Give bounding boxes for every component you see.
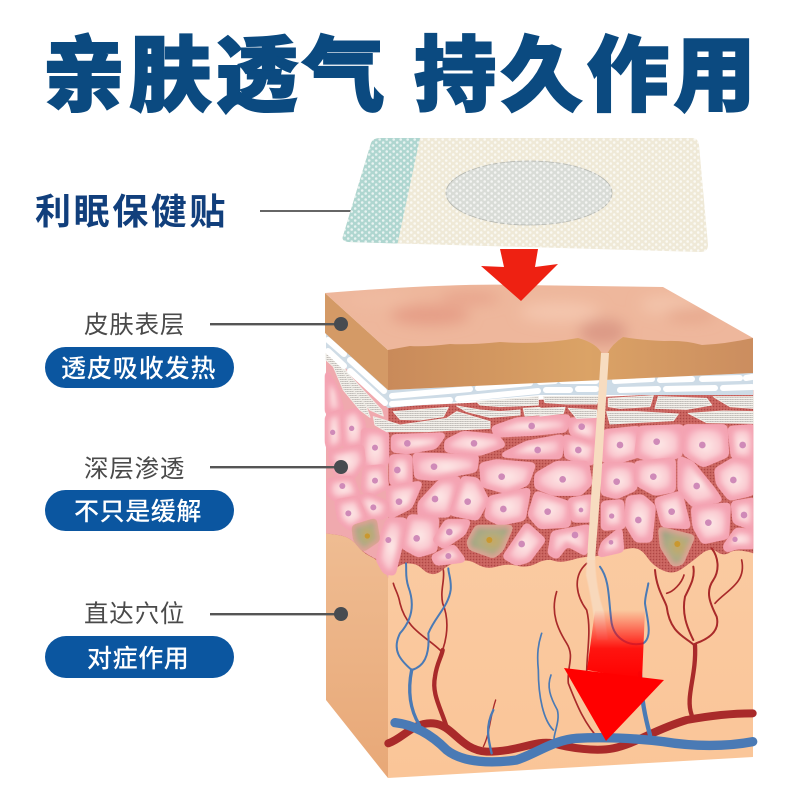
- label: reaches acupoint: [84, 600, 348, 628]
- pill: more than relief: 不只是缓解: [74, 498, 202, 526]
- label: deep penetration: 深层渗透: [84, 455, 185, 483]
- pill: transdermal absorption: [45, 347, 234, 388]
- stratum hatched layer: [326, 352, 753, 432]
- label: deep penetration: [84, 455, 348, 483]
- pill: targeted action: 对症作用: [87, 645, 189, 673]
- pill: targeted action: [45, 636, 234, 678]
- blood vessels: [388, 548, 753, 762]
- dermis layer: [326, 390, 753, 778]
- arrow: patch down to skin: [481, 249, 558, 301]
- tan skin surface layer: [325, 293, 753, 390]
- skin cross-section block: [320, 280, 760, 778]
- pill: more than relief: [45, 490, 234, 531]
- epidermis cell layer: [326, 350, 753, 578]
- title: 持久作用: [414, 31, 760, 122]
- leader line: product to patch: [260, 210, 353, 212]
- pill: transdermal absorption: 透皮吸收发热: [61, 355, 216, 383]
- title: [43, 31, 760, 122]
- big red arrow to acupoint: [564, 610, 664, 741]
- heading: product name: 利眠保健贴: [35, 191, 228, 232]
- veins: [395, 563, 753, 762]
- label: skin surface: 皮肤表层: [84, 311, 185, 339]
- label: reaches acupoint: 直达穴位: [84, 600, 185, 628]
- title: 亲肤透气: [43, 31, 389, 122]
- stratum white layer: [326, 333, 753, 408]
- hair root fade: [586, 558, 608, 640]
- hair shaft: [587, 353, 609, 560]
- label: skin surface: [84, 311, 348, 339]
- patch illustration: [342, 138, 708, 252]
- arteries: [388, 548, 753, 752]
- skin top surface: [326, 284, 753, 353]
